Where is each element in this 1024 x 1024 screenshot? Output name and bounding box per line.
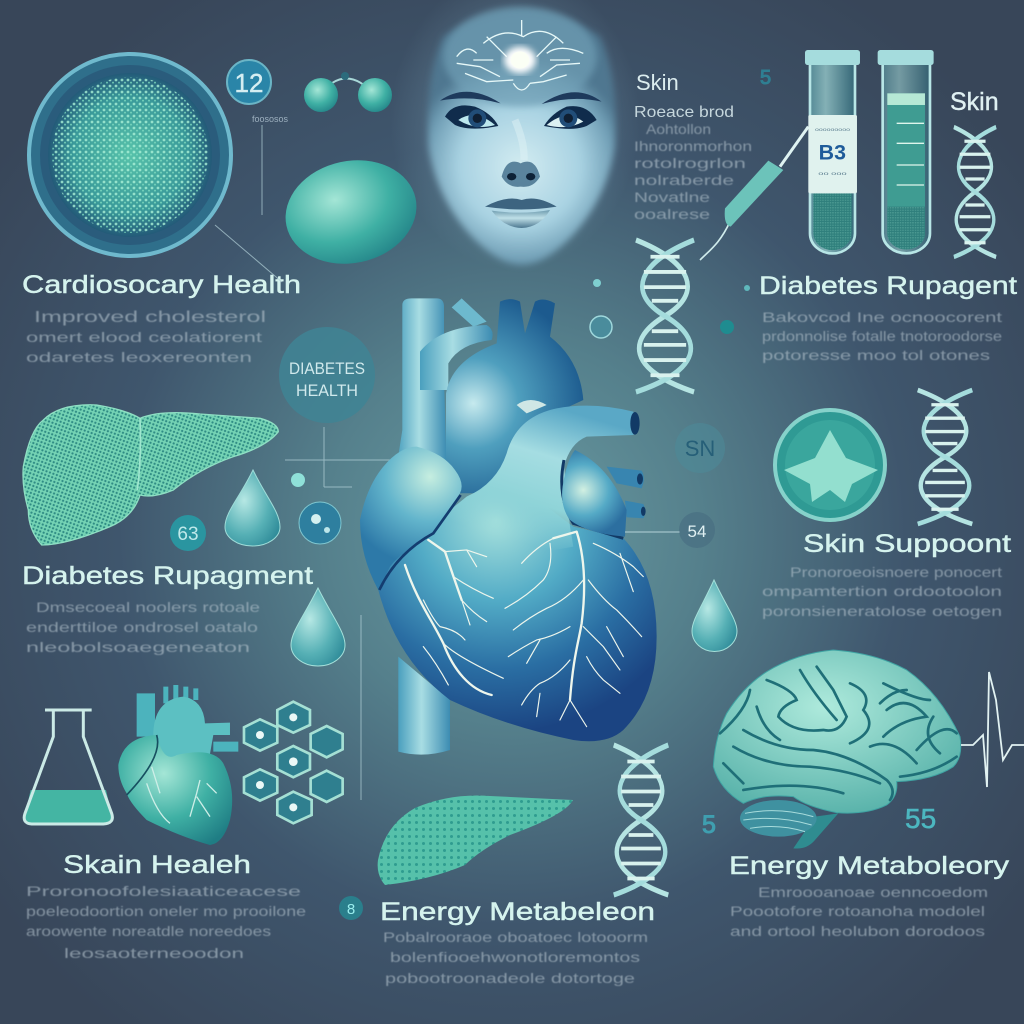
text block: cardiovascular description: omert elood ceolatiorent [26, 329, 262, 345]
icon: face [390, 0, 640, 270]
icon: SN bubble: SN [685, 436, 715, 461]
text block: cardiovascular description: odaretes leoxereonten [26, 349, 252, 365]
text block: diabetes description: potoresse moo tol otones [762, 347, 990, 363]
icon: hexagon molecules [244, 702, 343, 823]
panel: skin health [26, 851, 306, 961]
icon: small bubble [291, 473, 341, 544]
text block: description: Dmsecoeal noolers rotoale [36, 599, 260, 615]
icon: petri dish [29, 54, 231, 256]
text block: description: Proronoofolesiaaticeacese [26, 883, 301, 899]
badge: 5: 5 [760, 67, 771, 89]
heading: skin health: Skain Healeh [63, 851, 251, 879]
text block: diabetes description: Bakovcod Ine ocnoocorent [762, 309, 1002, 325]
badge: 12: 12 [235, 68, 263, 98]
icon: test tubes: oo ooo [818, 171, 847, 177]
icon: water drop right [692, 580, 737, 651]
heading: skin support: Skin Suppoont [803, 530, 1011, 558]
panel: skin rosacea [634, 67, 771, 222]
heading: diabetes support: Diabetes Rupagent [759, 272, 1017, 300]
icon: DNA right [918, 390, 972, 524]
icon: star badge [775, 410, 885, 520]
text block: description: aroowente noreatdle noreedoes [26, 923, 271, 939]
text block: description: poeleodoortion oneler mo prooilone [26, 903, 306, 919]
icon: liver bottom [378, 796, 573, 885]
badge: 8 [339, 896, 363, 920]
text block: description: ompamtertion ordootoolon [762, 583, 1002, 599]
text block: skin description: Novatlne [634, 189, 710, 205]
subheading: rosacea: Roeace brod [634, 104, 734, 121]
heading: energy metabolism: Energy Metaboleory [729, 852, 1010, 880]
icon: dot [720, 320, 734, 334]
panel: diabetes support [720, 272, 1017, 363]
panel: cardiovascular health [22, 54, 301, 365]
icon: liver left [23, 405, 278, 545]
text block: description [762, 564, 1002, 619]
badge: 12: foososos [252, 114, 289, 124]
icon: small bubble top [590, 279, 750, 338]
text block: diabetes description: prdonnolise fotalle tnotoroodorse [762, 328, 1002, 344]
text block: skin description [634, 121, 752, 222]
label: 55: 55 [905, 803, 936, 834]
text block: skin description: ooalrese [634, 206, 710, 222]
text block: description: and ortool heolubon dorodoos [730, 923, 985, 939]
panel: diabetes support left [22, 562, 313, 655]
icon: SN bubble [675, 423, 725, 473]
text block: description: bolenfiooehwonotloremontos [390, 949, 640, 965]
icon: water drop mid left [291, 588, 345, 666]
icon: DNA bottom [614, 745, 668, 895]
text block: description: leosaoterneoodon [64, 945, 244, 961]
heading: skin: Skin [950, 88, 999, 116]
heading: diabetes support: Diabetes Rupagment [22, 562, 313, 590]
heading: skin: Skin [636, 70, 679, 95]
text block: skin description: Ihnoronmorhon [634, 138, 752, 154]
heading: cardiovascular health: Cardiosocary Health [22, 271, 301, 299]
badge: diabetes health [279, 327, 375, 423]
badge: 12 [227, 60, 289, 124]
text block: description [730, 884, 988, 939]
text block: skin description: Aohtollon [646, 121, 711, 137]
text block: description: Emroooanoae oenncoedom [758, 884, 988, 900]
icon: molecules [304, 72, 392, 112]
text block: description: Poootofore rotoanoha modolel [730, 903, 985, 919]
icon: pill [276, 148, 426, 276]
panel: skin support [762, 530, 1011, 619]
badge: 54: 54 [688, 522, 706, 541]
text block: description: pobootroonadeole dotortoge [385, 970, 635, 986]
icon: connector line [215, 125, 400, 800]
label: 5: 5 [702, 811, 716, 839]
badge: 63: 63 [177, 524, 199, 545]
badge: 63 [170, 515, 206, 551]
icon: test tubes: ooooooooo [815, 127, 851, 132]
illustration: heart [360, 298, 657, 755]
text block: description: Pobalrooraoe oboatoec lotooorm [383, 929, 648, 945]
text block: description [26, 883, 306, 961]
panel: skin DNA [950, 88, 999, 257]
heading: energy metabolism: Energy Metabeleon [380, 898, 655, 926]
text block: description: poronsieneratolose oetogen [762, 603, 1002, 619]
icon: test tubes: B3 [819, 140, 846, 164]
panel: energy metabolism center [339, 896, 655, 986]
text block: description [383, 929, 648, 986]
icon: DNA center right [636, 240, 694, 392]
text block: description: nleobolsoaegeneaton [26, 639, 250, 655]
badge: diabetes health: HEALTH [296, 381, 358, 400]
icon: brain [713, 650, 961, 849]
text block: skin description: rotolrogrlon [634, 155, 746, 171]
text block: description: enderttiloe ondrosel oatalo [26, 619, 258, 635]
text block: description [26, 599, 260, 655]
text block: diabetes description [762, 309, 1002, 363]
icon: syringe [700, 127, 808, 260]
text block: cardiovascular description: Improved cholesterol [34, 309, 266, 326]
icon: water drop left [225, 470, 280, 546]
icon: test tubes [805, 50, 934, 253]
badge: 8: 8 [347, 901, 355, 918]
icon: small heart [118, 685, 238, 845]
icon: pulse line [961, 672, 1024, 787]
badge: diabetes health: DIABETES [289, 359, 365, 378]
text block: description: Pronoroeoisnoere ponocert [790, 564, 1002, 580]
text block: skin description: nolraberde [634, 172, 734, 188]
text block: cardiovascular description [26, 309, 266, 365]
badge: 54 [625, 512, 715, 548]
icon: DNA [954, 127, 996, 257]
icon: flask [24, 710, 112, 824]
panel: energy metabolism right [729, 852, 1010, 939]
